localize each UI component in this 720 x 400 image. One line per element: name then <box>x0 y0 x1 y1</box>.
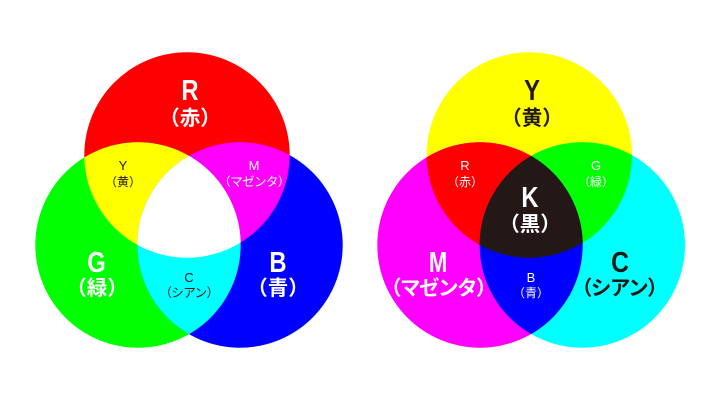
label: K: K <box>521 181 539 214</box>
label: C <box>572 246 666 300</box>
label: C: C <box>611 246 629 278</box>
label: G <box>66 246 128 300</box>
overlap: black centre <box>480 156 583 258</box>
circle: red <box>84 52 290 258</box>
label: C: （シアン） <box>572 277 666 300</box>
label: C <box>159 270 219 300</box>
label: B: （青） <box>247 277 309 300</box>
label: M: （マゼンタ） <box>218 175 290 189</box>
circle: cyan <box>480 142 685 348</box>
label: R <box>159 74 221 130</box>
label: G <box>578 158 614 189</box>
label: Y <box>501 74 563 130</box>
circle: yellow <box>427 52 632 258</box>
label: G: G <box>591 158 601 173</box>
label: Y: Y <box>524 74 540 107</box>
circle: magenta <box>377 142 583 348</box>
label: M: M <box>429 247 447 279</box>
label: M: （マゼンタ） <box>381 276 495 300</box>
label: G: （緑） <box>578 175 614 189</box>
circle: blue <box>137 142 343 348</box>
label: R: R <box>460 158 470 173</box>
label: K <box>499 181 561 236</box>
circle: green <box>35 142 241 348</box>
label: Y: （黄） <box>501 107 563 130</box>
label: M <box>381 247 495 300</box>
overlap: green <box>480 142 632 245</box>
label: G: G <box>87 246 106 279</box>
label: R: （赤） <box>447 175 483 189</box>
diagram: subtractive CMYK colour mixing <box>377 52 685 348</box>
label: C: C <box>184 270 194 285</box>
label: B <box>247 246 309 300</box>
label: B: B <box>269 246 287 279</box>
label: Y <box>105 158 141 189</box>
label: R <box>447 158 483 189</box>
overlap: cyan <box>137 156 241 334</box>
label: Y: Y <box>119 158 128 173</box>
overlap: magenta <box>137 142 290 245</box>
label: R: （赤） <box>159 107 221 130</box>
overlap: blue <box>480 156 583 334</box>
label: B <box>513 270 549 300</box>
label: K: （黒） <box>499 213 561 236</box>
label: M: M <box>249 158 259 173</box>
overlap: red <box>426 142 583 245</box>
label: Y: （黄） <box>105 175 141 189</box>
label: B: （青） <box>513 286 549 300</box>
label: R: R <box>181 74 199 107</box>
overlap: white centre <box>137 156 241 258</box>
label: B: B <box>527 270 535 285</box>
overlap: yellow <box>84 142 189 245</box>
diagram: additive RGB colour mixing <box>35 52 343 348</box>
label: M <box>218 158 290 189</box>
label: G: （緑） <box>66 277 128 300</box>
label: C: （シアン） <box>159 286 219 300</box>
